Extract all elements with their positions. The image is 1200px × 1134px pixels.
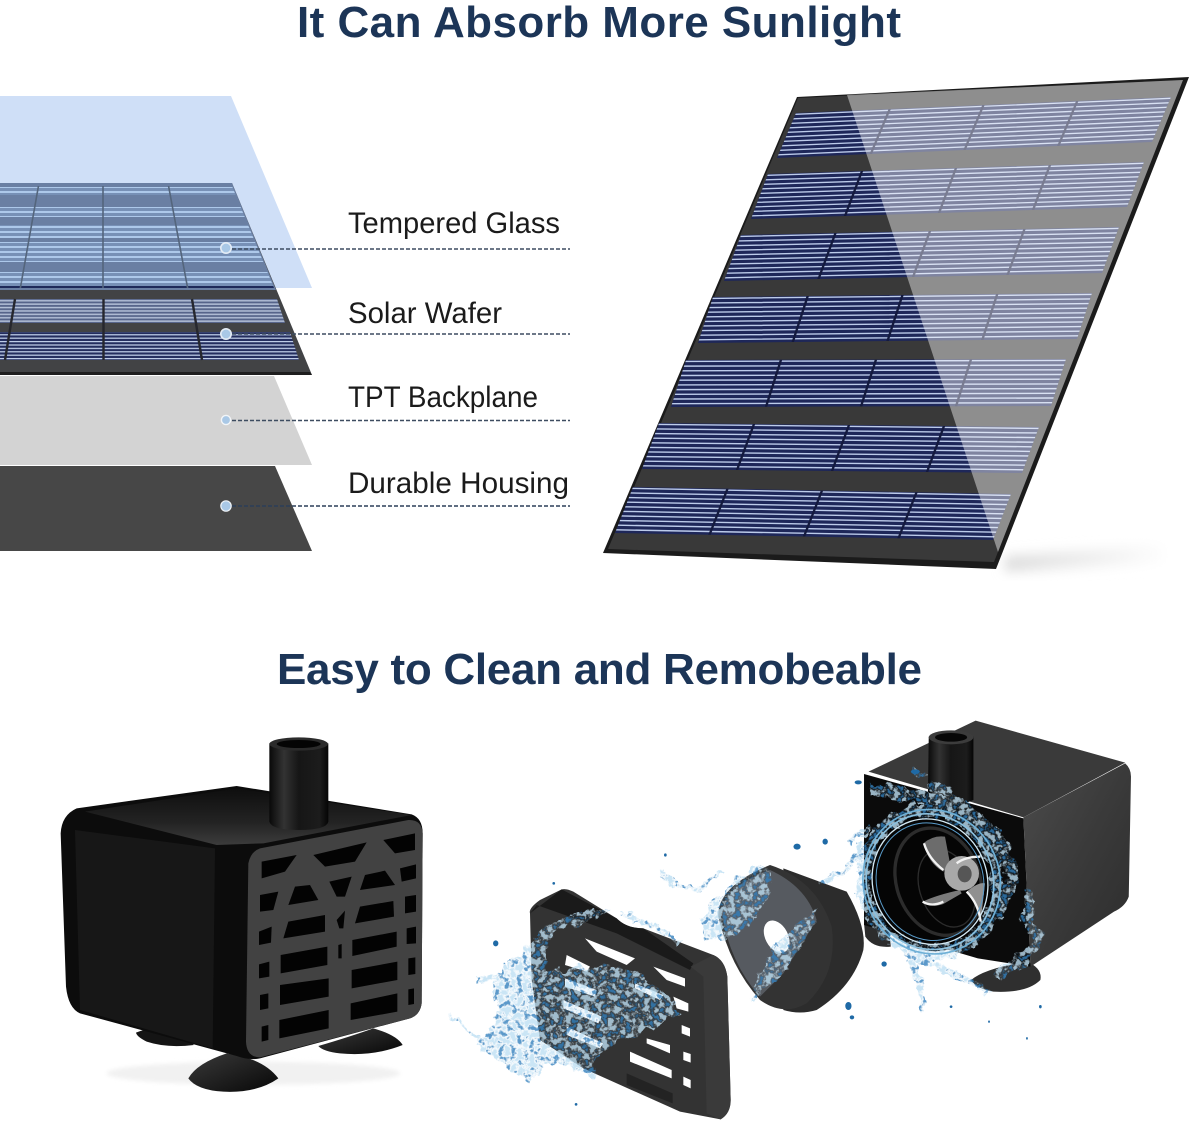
left face xyxy=(75,830,215,1048)
outlet spout xyxy=(269,737,328,830)
callout: Durable Housing xyxy=(221,467,570,511)
filter slots xyxy=(563,938,691,1088)
layer: tempered glass sheet xyxy=(0,96,312,288)
callout: Solar Wafer xyxy=(221,297,570,339)
scattered water droplets xyxy=(493,769,1042,1106)
water over cone xyxy=(660,843,863,1000)
callout: TPT Backplane: TPT Backplane xyxy=(348,381,538,414)
callout: TPT Backplane xyxy=(221,381,570,425)
solar cell rows xyxy=(615,97,1171,540)
plate recess xyxy=(627,1073,673,1103)
impeller chamber xyxy=(844,770,1040,1010)
spout xyxy=(928,730,973,805)
glass reflection xyxy=(847,80,1183,552)
suction feet xyxy=(136,1028,403,1092)
disassembled pump housing xyxy=(864,721,1131,992)
pump shadow xyxy=(107,1062,400,1085)
housing side xyxy=(1023,763,1131,967)
housing front xyxy=(864,774,1031,967)
water splash over filter xyxy=(450,908,680,1083)
intake slots xyxy=(259,833,416,1042)
cone front face xyxy=(718,865,833,1009)
panel ground shadow xyxy=(1005,544,1170,572)
layer: durable housing xyxy=(0,466,312,551)
face plate xyxy=(246,820,423,1057)
callout: Tempered Glass: Tempered Glass xyxy=(348,207,560,240)
layer: solar wafer xyxy=(0,183,312,375)
cone cover xyxy=(660,843,864,1012)
inner rings xyxy=(880,816,996,948)
pump body xyxy=(61,786,423,1059)
title: Easy to Clean and Remobeable: Easy to Clean and Remobeable xyxy=(277,645,922,694)
left foot xyxy=(864,920,891,947)
solar panel product image xyxy=(603,77,1189,572)
layer stack diagram xyxy=(0,96,312,551)
top face xyxy=(85,788,412,845)
water ring strands xyxy=(844,791,1019,972)
cone glass window xyxy=(722,870,817,997)
plate top lip xyxy=(530,889,693,970)
impeller xyxy=(923,836,985,922)
cone outflow hole xyxy=(759,916,795,957)
rear foot xyxy=(971,962,1041,992)
water splash around chamber xyxy=(844,770,1040,1010)
assembled pump xyxy=(61,737,423,1092)
housing top xyxy=(868,721,1125,817)
plate right edge xyxy=(691,955,731,1119)
layer: TPT backplane xyxy=(0,376,312,465)
callout: Durable Housing: Durable Housing xyxy=(348,467,569,500)
cone barrel xyxy=(783,868,864,1012)
chamber cavity xyxy=(852,798,1011,966)
plate body xyxy=(530,889,731,1119)
panel inner surface xyxy=(608,80,1183,562)
callout: Solar Wafer: Solar Wafer xyxy=(348,297,502,330)
panel outer frame xyxy=(603,77,1189,569)
callout: Tempered Glass xyxy=(221,207,570,253)
filter plate xyxy=(450,889,731,1119)
